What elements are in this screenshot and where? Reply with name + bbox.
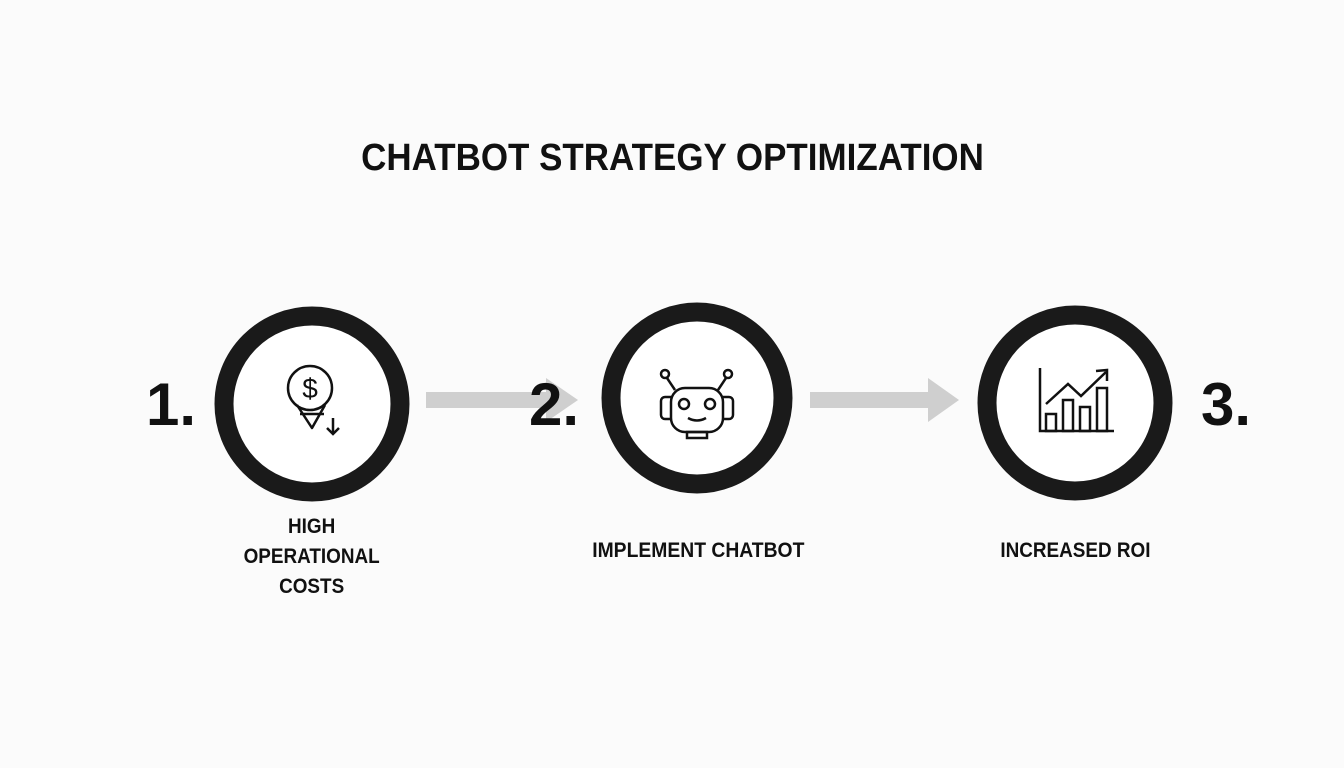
number 3: 3.: [1201, 371, 1251, 438]
number 2: 2.: [529, 371, 579, 438]
number 1: 1.: [146, 371, 196, 438]
step 2 circle: [611, 312, 783, 484]
icon: dollar pin down: [288, 366, 339, 434]
icon: bar chart growth: [1040, 368, 1114, 431]
label 3: INCREASED ROI: [1000, 539, 1150, 562]
title: CHATBOT STRATEGY OPTIMIZATION: [361, 137, 983, 179]
label 1: [244, 515, 380, 598]
icon: dollar pin down: $: [302, 373, 318, 404]
icon: robot: [661, 370, 733, 438]
step 3 circle: [987, 315, 1163, 491]
arrow 1: [426, 378, 578, 422]
step 1 circle: [224, 316, 400, 492]
label 1: OPERATIONAL: [244, 545, 380, 568]
label 2: IMPLEMENT CHATBOT: [592, 539, 804, 562]
label 1: HIGH: [288, 515, 336, 538]
arrow 2: [810, 378, 959, 422]
label 1: COSTS: [279, 575, 345, 598]
